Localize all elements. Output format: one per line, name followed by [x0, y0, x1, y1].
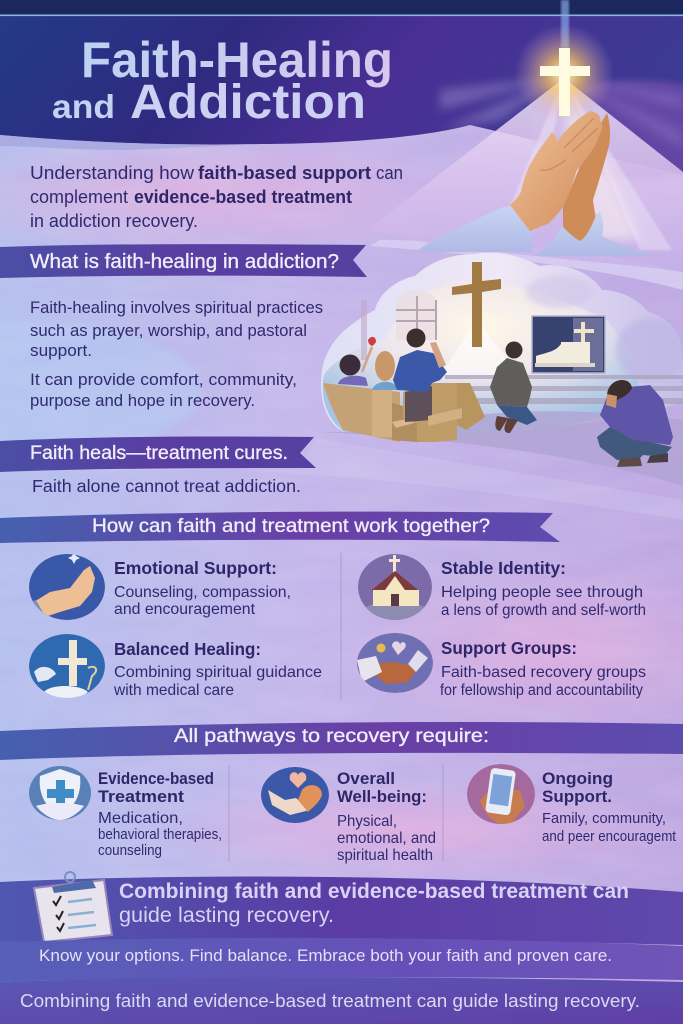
item: emotional support: Counseling, compassion, [114, 584, 291, 601]
item: emotional support [29, 554, 290, 620]
item: evidence-based treatment: Treatment [98, 787, 184, 806]
item: stable identity: Helping people see through [441, 584, 643, 601]
banner: combining faith: Combining faith and evidence-based treatment can [119, 879, 629, 903]
item: overall well-being: Overall [337, 769, 395, 788]
item: ongoing support [467, 764, 677, 845]
section ribbon: how can faith and treatment work together [0, 512, 560, 543]
left sleeve [414, 206, 532, 252]
icon: cross and medical items [29, 634, 105, 698]
title: and [52, 88, 115, 125]
icon: wooden cross [452, 262, 501, 347]
floor [320, 411, 683, 486]
item: balanced healing: with medical care [113, 682, 234, 699]
banner: know your options: Know your options. Find balance. Embrace both your faith and proven care. [39, 946, 612, 965]
header band [0, 0, 683, 180]
right sleeve [535, 212, 654, 256]
light rays [440, 320, 520, 375]
icon: handshake [357, 633, 433, 693]
icon: medical shield [29, 766, 91, 820]
section ribbon: what is faith-healing: What is faith-healing in addiction? [30, 251, 339, 273]
item: balanced healing: Balanced Healing: [114, 639, 261, 659]
pews [323, 383, 485, 442]
section ribbon: faith heals: Faith heals—treatment cures. [30, 442, 288, 464]
item: balanced healing [29, 634, 322, 699]
item: ongoing support: Support. [542, 787, 612, 806]
banner: combining faith [0, 872, 683, 945]
item: stable identity [358, 554, 646, 622]
text: what is faith-healing: such as prayer, worship, and pastoral [30, 321, 307, 340]
item: overall well-being [261, 767, 436, 864]
icon: hands and heart [261, 767, 329, 823]
text: what is faith-healing: Faith-healing involves spiritual practices [30, 298, 323, 317]
illustration: church scene in cloud [320, 253, 683, 486]
back hand [563, 113, 610, 241]
banner: know your options [0, 938, 683, 982]
item: support groups [357, 633, 646, 699]
section ribbon: faith heals [0, 436, 316, 472]
intro text [30, 162, 403, 231]
illustration: praying hands and glowing cross [370, 0, 683, 272]
text: what is faith-healing: support. [30, 341, 92, 360]
people in pews [338, 328, 447, 392]
item: stable identity: Stable Identity: [441, 558, 566, 578]
text: faith alone: Faith alone cannot treat addiction. [32, 476, 301, 496]
item: ongoing support: Ongoing [542, 769, 613, 788]
section ribbon: how can faith and treatment work together: How can faith and treatment work together? [92, 515, 490, 537]
title [52, 32, 393, 129]
item: stable identity: a lens of growth and self-worth [441, 602, 646, 619]
text: what is faith-healing: It can provide comfort, community, [30, 370, 297, 389]
steps [445, 375, 683, 404]
item: evidence-based treatment: behavioral therapies, [98, 826, 222, 843]
text: what is faith-healing: purpose and hope in recovery. [30, 391, 255, 410]
item: emotional support: and encouragement [114, 601, 256, 618]
panel: faith and treatment [26, 552, 646, 700]
intro text: Understanding how [30, 162, 195, 183]
church window [361, 290, 437, 360]
icon: cross [540, 48, 590, 116]
intro text: complement [30, 186, 128, 207]
item: evidence-based treatment: counseling [98, 842, 162, 859]
section band: all pathways to recovery [0, 722, 683, 760]
icon: phone in hands [467, 764, 535, 826]
title: Faith-Healing [81, 32, 393, 88]
item: evidence-based treatment: Evidence-based [98, 769, 214, 788]
intro text: can [376, 162, 403, 183]
item: support groups: Support Groups: [441, 638, 577, 658]
item: overall well-being: Physical, [337, 813, 397, 830]
item: overall well-being: Well-being: [337, 787, 427, 806]
item: support groups: Faith-based recovery groups [441, 664, 646, 681]
item: evidence-based treatment: Medication, [98, 810, 183, 827]
item: ongoing support: Family, community, [542, 810, 666, 827]
item: evidence-based treatment [29, 766, 222, 859]
item: emotional support: Emotional Support: [114, 558, 277, 578]
section band: all pathways to recovery: All pathways to recovery require: [174, 725, 489, 747]
crouching man [597, 380, 673, 467]
panel: recovery pathways [29, 764, 677, 864]
front hand [510, 111, 602, 231]
intro text: faith-based support [198, 162, 371, 183]
footer band: Combining faith and evidence-based treatment can guide lasting recovery. [20, 991, 640, 1011]
item: overall well-being: emotional, and [337, 830, 436, 847]
icon: chapel [358, 554, 432, 622]
intro text: in addiction recovery. [30, 210, 198, 231]
item: overall well-being: spiritual health [337, 847, 433, 864]
icon: open hand [29, 554, 105, 620]
footer band [0, 977, 683, 1024]
banner: combining faith: guide lasting recovery. [119, 903, 334, 927]
title: Addiction [130, 76, 366, 129]
kneeling man [490, 342, 537, 433]
cloud [321, 253, 683, 434]
item: support groups: for fellowship and accountability [440, 682, 643, 699]
section ribbon: what is faith-healing [0, 244, 367, 278]
text: what is faith-healing [30, 298, 323, 410]
item: balanced healing: Combining spiritual guidance [114, 664, 322, 681]
intro text: evidence-based treatment [134, 186, 352, 207]
icon: clipboard [34, 872, 112, 942]
picture: bed [532, 316, 605, 373]
